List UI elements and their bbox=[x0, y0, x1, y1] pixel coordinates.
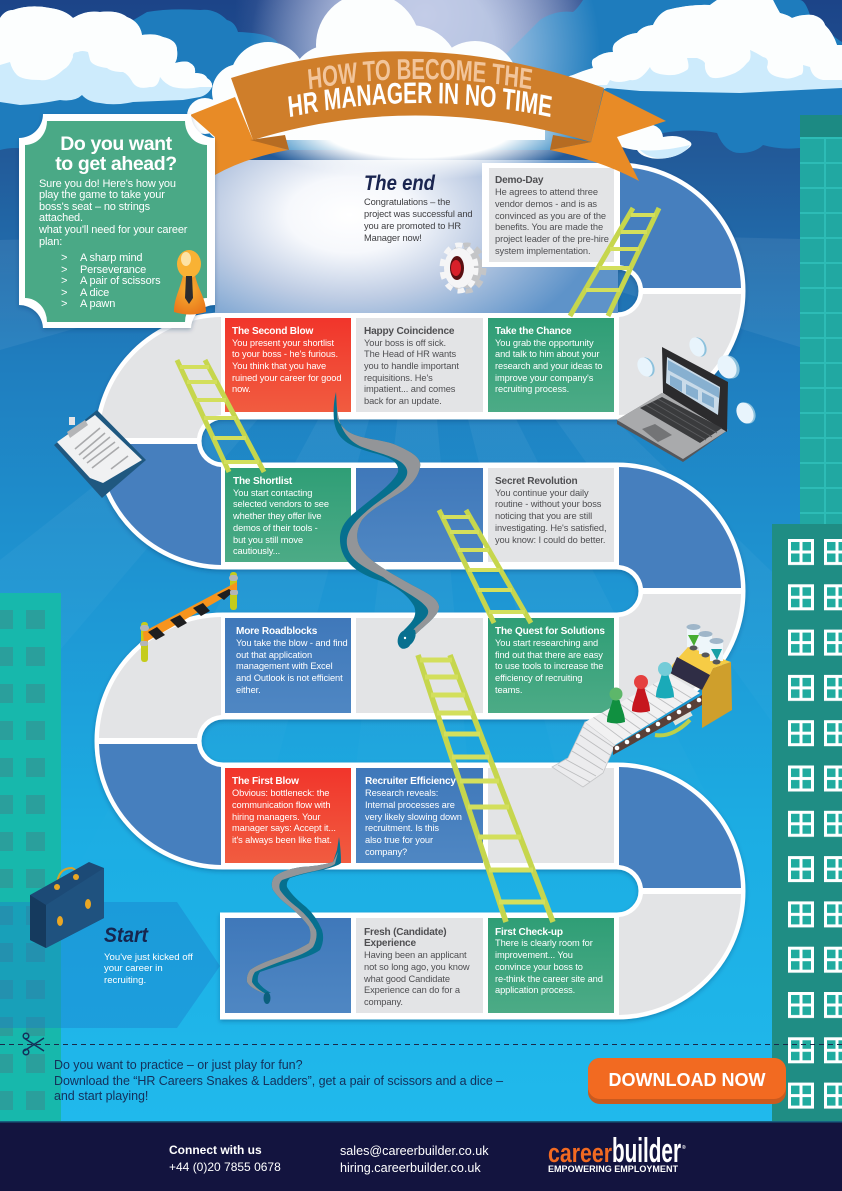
cell: The Shortlist: but you still move bbox=[233, 535, 303, 545]
start text: your career in bbox=[104, 963, 163, 974]
cell: Happy Coincidence: The Head of HR wants bbox=[364, 349, 456, 359]
panel text: Perseverance bbox=[80, 264, 146, 276]
cell: Secret Revolution: you know: I could do better. bbox=[495, 535, 605, 545]
cut line bbox=[0, 1044, 842, 1046]
cell: Recruiter Efficiency: Research reveals: bbox=[365, 788, 438, 798]
panel heading: to get ahead? bbox=[55, 153, 177, 175]
cell: The Second Blow: You present your shortlist bbox=[232, 338, 334, 348]
cell: The Shortlist: whether they offer live bbox=[232, 511, 321, 521]
cell: First Check-up: convince your boss to bbox=[495, 962, 583, 972]
cell: The Second Blow: The Second Blow bbox=[232, 326, 313, 337]
panel heading bbox=[55, 133, 177, 175]
cell: The Quest for Solutions: to use tools to increase the bbox=[495, 661, 603, 671]
clouds: white center bbox=[187, 0, 545, 142]
cell: Recruiter Efficiency: Internal processes are bbox=[365, 800, 455, 810]
panel text: attached. bbox=[39, 212, 83, 224]
cell: First Check-up: First Check-up bbox=[495, 927, 563, 938]
icon: scissors bbox=[23, 1033, 44, 1055]
panel heading: Do you want bbox=[60, 133, 173, 155]
cell: First Check-up bbox=[488, 918, 614, 1013]
cell: The Quest for Solutions: teams. bbox=[495, 685, 522, 695]
cell: The Quest for Solutions: efficiency of recruiting bbox=[495, 673, 582, 683]
cell: The Second Blow bbox=[225, 318, 351, 412]
icon: conveyor machine bbox=[552, 624, 732, 787]
cell: The Shortlist: demos of their tools - bbox=[233, 523, 318, 533]
cell: The First Blow: communication flow with bbox=[232, 800, 330, 810]
snake: large bbox=[334, 392, 439, 649]
clouds: small right puff bbox=[600, 97, 691, 159]
cell: Happy Coincidence: you to handle important bbox=[364, 361, 459, 371]
cell: gray snake head square bbox=[356, 618, 483, 713]
cell: The First Blow: it's always been like that. bbox=[232, 835, 332, 845]
icon: briefcase bbox=[30, 862, 104, 948]
cell: Fresh (Candidate) Experience: not so long ago, you know bbox=[364, 962, 470, 972]
cell: Take the Chance: Take the Chance bbox=[495, 326, 572, 337]
snake: small bbox=[247, 837, 341, 1004]
board: end area glow bbox=[215, 160, 618, 313]
start text bbox=[104, 924, 193, 986]
cell: Demo-Day: convinced as you are of the bbox=[495, 211, 606, 221]
board: curved turn segments bbox=[99, 167, 741, 1015]
cell: The Quest for Solutions: find out that there are easy bbox=[495, 650, 603, 660]
cell: Happy Coincidence: Happy Coincidence bbox=[364, 326, 455, 337]
cell: The Shortlist bbox=[225, 468, 351, 562]
icon: laptop with clouds bbox=[617, 335, 759, 462]
panel text: Sure you do! Here's how you bbox=[39, 178, 176, 190]
icon: road barrier bbox=[140, 572, 238, 662]
start arrow bbox=[0, 902, 220, 1028]
cell: The Shortlist: You start contacting bbox=[233, 488, 312, 498]
clouds: blue back layer bbox=[0, 0, 842, 153]
panel text: what you'll need for your career bbox=[38, 224, 188, 236]
the end text: The end bbox=[364, 172, 436, 195]
cell: Demo-Day: benefits. You are made the bbox=[495, 222, 603, 232]
cell: More Roadblocks: More Roadblocks bbox=[236, 626, 318, 637]
cell: Take the Chance: and talk to him about your bbox=[495, 349, 599, 359]
logo: careerbuilder: EMPOWERING EMPLOYMENT bbox=[548, 1164, 678, 1174]
building: right with windows bbox=[772, 524, 842, 1122]
cell: Happy Coincidence: impatient... and comes bbox=[364, 384, 456, 394]
ladder: second blow to shortlist bbox=[177, 360, 264, 472]
cell: The First Blow bbox=[225, 768, 351, 863]
cell: Secret Revolution: noticing that you are still bbox=[495, 511, 592, 521]
cell: Demo-Day bbox=[482, 163, 620, 267]
cell: blue snake square bbox=[356, 468, 483, 562]
cell: Take the Chance: recruiting process. bbox=[495, 384, 569, 394]
cell: Recruiter Efficiency bbox=[356, 768, 483, 863]
panel text: A dice bbox=[80, 287, 109, 299]
cell: Demo-Day: project leader of the pre-hire bbox=[495, 234, 609, 244]
cell: The Second Blow: now. bbox=[232, 384, 251, 394]
ladder: top right bbox=[570, 208, 659, 316]
cell: Secret Revolution: You continue your daily bbox=[495, 488, 589, 498]
cell: The Second Blow: to your boss - he's furious. bbox=[232, 349, 338, 359]
panel text: > bbox=[61, 298, 67, 310]
cell: The Shortlist: The Shortlist bbox=[233, 476, 293, 487]
cell: First Check-up: improvement... You bbox=[495, 950, 573, 960]
download prompt text bbox=[54, 1058, 503, 1103]
building: left bbox=[0, 593, 61, 1122]
cloud: soft white under ribbon bbox=[248, 80, 588, 180]
contact text: Connect with us bbox=[169, 1143, 262, 1157]
cell: Secret Revolution: routine - without your boss bbox=[495, 499, 602, 509]
cell: Secret Revolution bbox=[488, 468, 614, 562]
cell: Take the Chance: improve your company's bbox=[495, 373, 594, 383]
contact text: +44 (0)20 7855 0678 bbox=[169, 1160, 281, 1174]
clouds: white left bbox=[0, 6, 212, 105]
cell: The First Blow: Obvious: bottleneck: the bbox=[232, 788, 329, 798]
start text: Start bbox=[104, 924, 149, 947]
download prompt text: and start playing! bbox=[54, 1089, 148, 1103]
contact text bbox=[169, 1143, 489, 1175]
cell: Secret Revolution: investigating. He's satisfied, bbox=[495, 523, 606, 533]
cell: Demo-Day: vendor demos - and is as bbox=[495, 199, 597, 209]
panel text: A pawn bbox=[80, 298, 115, 310]
icon: pawn green bbox=[607, 688, 625, 724]
ribbon title: HR MANAGER IN NO TIME bbox=[288, 82, 552, 117]
download button bbox=[588, 1058, 786, 1104]
cell: The Second Blow: You think that you have bbox=[232, 361, 326, 371]
panel: do you want to get ahead bbox=[19, 114, 215, 328]
cell: More Roadblocks bbox=[225, 618, 351, 713]
cell: First Check-up: application process. bbox=[495, 985, 575, 995]
ribbon title: HOW TO BECOME THE bbox=[308, 58, 532, 90]
cell: Recruiter Efficiency: also true for your bbox=[365, 835, 433, 845]
cell: More Roadblocks: and Outlook is not efficient bbox=[236, 673, 343, 683]
cell: Take the Chance: You grab the opportunity bbox=[495, 338, 594, 348]
cell: Fresh (Candidate) Experience: what good Candidate bbox=[363, 974, 450, 984]
cell: Recruiter Efficiency: Recruiter Efficiency bbox=[365, 776, 456, 787]
icon: clipboard bbox=[54, 410, 146, 498]
cell: Fresh (Candidate) Experience bbox=[356, 918, 483, 1013]
cell: The First Blow: manager says: Accept it... bbox=[232, 823, 336, 833]
cell: More Roadblocks: management with Excel bbox=[236, 661, 333, 671]
cell: The Second Blow: ruined your career for good bbox=[232, 373, 341, 383]
icon: orange pawn with tie bbox=[174, 250, 206, 314]
cell: More Roadblocks: You take the blow - and find bbox=[236, 638, 348, 648]
cell: Take the Chance: research and your ideas to bbox=[495, 361, 602, 371]
cell: Recruiter Efficiency: very likely slowing down bbox=[365, 812, 462, 822]
cell: Demo-Day: He agrees to attend three bbox=[495, 187, 598, 197]
panel text: play the game to take your bbox=[39, 189, 165, 201]
cell: Take the Chance bbox=[488, 318, 614, 412]
logo: careerbuilder: builder bbox=[612, 1132, 681, 1170]
panel text: > bbox=[61, 287, 67, 299]
panel text bbox=[38, 178, 188, 310]
building: top right bbox=[800, 115, 842, 525]
icon: pawn red bbox=[632, 675, 650, 712]
cell: The First Blow: The First Blow bbox=[232, 776, 299, 787]
cell: Recruiter Efficiency: company? bbox=[365, 847, 407, 857]
download button: DOWNLOAD NOW bbox=[609, 1070, 765, 1090]
ladder: long first check-up bbox=[418, 655, 553, 922]
icon: pawn cyan bbox=[656, 662, 674, 698]
panel text: A pair of scissors bbox=[80, 275, 161, 287]
panel text: plan: bbox=[39, 236, 62, 248]
the end text bbox=[364, 172, 472, 243]
cell: Happy Coincidence: back for an update. bbox=[364, 396, 442, 406]
cell: Happy Coincidence: Your boss is off sick. bbox=[364, 338, 446, 348]
the end text: Manager now! bbox=[364, 233, 422, 243]
the end text: Congratulations – the bbox=[364, 197, 450, 207]
the end text: project was successful and bbox=[364, 209, 472, 219]
panel text: boss's seat – no strings bbox=[39, 201, 151, 213]
logo: careerbuilder: career bbox=[548, 1138, 612, 1168]
start text: You've just kicked off bbox=[104, 952, 193, 963]
cell: gray ladder square bbox=[488, 768, 614, 863]
cell: The Shortlist: selected vendors to see bbox=[233, 499, 329, 509]
the end text: you are promoted to HR bbox=[364, 221, 461, 231]
cell: Fresh (Candidate) Experience: Experience bbox=[364, 938, 416, 949]
logo: careerbuilder bbox=[548, 1132, 686, 1174]
cell: The First Blow: hiring managers. Your bbox=[232, 812, 320, 822]
panel text: > bbox=[61, 264, 67, 276]
contact text: hiring.careerbuilder.co.uk bbox=[340, 1161, 481, 1175]
ladder: secret revolution bbox=[439, 510, 531, 623]
cell: Fresh (Candidate) Experience: Experience can do for a bbox=[364, 985, 461, 995]
cell: The Quest for Solutions: You start researching and bbox=[495, 638, 598, 648]
cell: Fresh (Candidate) Experience: Having been an applicant bbox=[364, 950, 467, 960]
contact text: sales@careerbuilder.co.uk bbox=[340, 1144, 489, 1158]
cell: The Quest for Solutions: The Quest for Solutions bbox=[495, 626, 605, 637]
cell: More Roadblocks: either. bbox=[236, 685, 261, 695]
cell: Demo-Day: Demo-Day bbox=[495, 175, 544, 186]
icon: gear bbox=[442, 245, 484, 291]
panel text: > bbox=[61, 275, 67, 287]
clouds: white right bbox=[558, 0, 842, 93]
cell: blue small snake square bbox=[225, 918, 351, 1013]
ribbon title bbox=[191, 51, 666, 181]
download prompt text: Do you want to practice – or just play for fun? bbox=[54, 1058, 303, 1072]
logo: careerbuilder: ® bbox=[682, 1144, 686, 1151]
cell: Happy Coincidence: requisitions. He's bbox=[364, 373, 433, 383]
footer bbox=[0, 1121, 842, 1191]
cell: The Shortlist: cautiously... bbox=[233, 546, 280, 556]
cell: Secret Revolution: Secret Revolution bbox=[495, 476, 577, 487]
cell: Recruiter Efficiency: recruitment. Is this bbox=[365, 823, 439, 833]
game board: track outline bbox=[148, 162, 692, 966]
cell: Demo-Day: system implementation. bbox=[495, 246, 590, 256]
cell: Happy Coincidence bbox=[356, 318, 483, 412]
start text: recruiting. bbox=[104, 975, 146, 986]
cell: The Quest for Solutions bbox=[488, 618, 614, 713]
panel text: A sharp mind bbox=[80, 252, 142, 264]
download prompt text: Download the “HR Careers Snakes & Ladders”, get a pair of scissors and a dice – bbox=[54, 1074, 503, 1088]
cell: First Check-up: There is clearly room for bbox=[495, 938, 593, 948]
panel text: > bbox=[61, 252, 67, 264]
cell: First Check-up: re-think the career site and bbox=[495, 974, 603, 984]
cell: More Roadblocks: out that application bbox=[236, 650, 312, 660]
cell: Fresh (Candidate) Experience: company. bbox=[364, 997, 403, 1007]
cell: Fresh (Candidate) Experience: Fresh (Candidate) bbox=[364, 927, 446, 938]
